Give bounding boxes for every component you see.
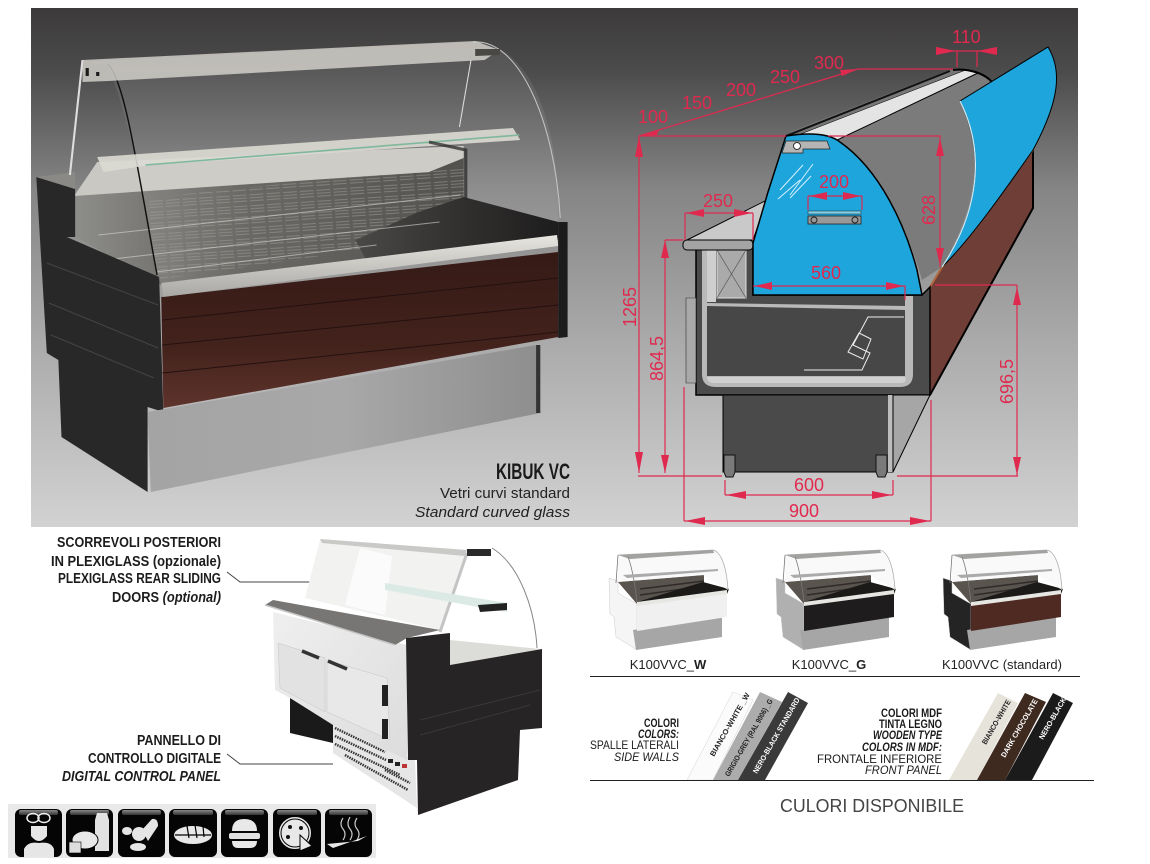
canopy white strip bbox=[800, 70, 978, 142]
blue side glass bbox=[942, 47, 1057, 267]
wood colour swatches: BIANCO-WHITE bbox=[980, 698, 1013, 746]
blue product area bbox=[753, 134, 922, 295]
dimension labels: 600 bbox=[794, 475, 824, 495]
service column bbox=[706, 250, 716, 302]
wood colour swatches bbox=[949, 693, 1073, 780]
base bbox=[723, 395, 893, 472]
dimension labels: 864,5 bbox=[647, 336, 667, 381]
dimension labels: 560 bbox=[811, 263, 841, 283]
door 1 bbox=[278, 643, 325, 712]
icon: chef bbox=[15, 809, 62, 857]
model labels: K100VVC_W bbox=[630, 657, 707, 672]
wood colours text: FRONT PANEL bbox=[865, 763, 942, 777]
dark tub bbox=[356, 197, 558, 260]
side wall colours text: SIDE WALLS bbox=[614, 750, 679, 764]
dimension labels: 1265 bbox=[620, 287, 640, 327]
side wall colours text bbox=[590, 716, 679, 764]
icon: hot plate bbox=[325, 809, 372, 857]
wood colours text: COLORS IN MDF: bbox=[862, 740, 942, 754]
cabinet body bbox=[696, 248, 930, 395]
callout: rear sliding doors bbox=[51, 535, 365, 606]
icon: loaf bbox=[169, 809, 217, 857]
dimension labels: 110 bbox=[952, 27, 981, 47]
dimension labels: 150 bbox=[682, 93, 712, 113]
white body bbox=[273, 612, 407, 760]
wood colours text bbox=[817, 706, 943, 777]
shelf bracket bbox=[808, 216, 861, 224]
callout: digital control panel bbox=[62, 733, 333, 785]
dimension labels: 628 bbox=[919, 195, 939, 225]
front rail bbox=[161, 235, 558, 297]
control panel bbox=[388, 759, 400, 766]
back wall bbox=[72, 157, 558, 285]
callout: rear sliding doors: DOORS (optional) bbox=[112, 590, 221, 606]
pale band under the shelf bbox=[74, 146, 464, 196]
under-cabinet bbox=[290, 698, 333, 743]
rear view display case photo bbox=[265, 539, 542, 815]
variant: grey bbox=[776, 550, 896, 650]
model labels: K100VVC (standard) bbox=[942, 657, 1062, 672]
grille bbox=[333, 723, 417, 808]
dimension labels: 250 bbox=[703, 191, 733, 211]
dimension labels: 250 bbox=[770, 67, 800, 87]
callout: rear sliding doors: SCORREVOLI POSTERIORI bbox=[57, 535, 221, 551]
side wall colour swatches bbox=[687, 690, 808, 780]
brown side panel bbox=[930, 150, 1033, 395]
wood colours text: FRONTALE INFERIORE bbox=[817, 752, 942, 766]
dimension labels: 696,5 bbox=[997, 359, 1017, 404]
black side bbox=[406, 633, 542, 815]
dimension labels: 200 bbox=[819, 172, 849, 192]
door 2 bbox=[327, 660, 390, 740]
side wall colours text: SPALLE LATERALI bbox=[590, 738, 679, 752]
side wall colours text: COLORI bbox=[644, 716, 679, 730]
steel base bbox=[148, 345, 540, 492]
wood front bbox=[161, 252, 558, 408]
wood colours text: COLORI MDF bbox=[881, 706, 942, 720]
callout: digital control panel: PANNELLO DI bbox=[137, 733, 221, 749]
subtitle english: Standard curved glass bbox=[415, 504, 571, 521]
heading: available colours: CULORI DISPONIBILE bbox=[780, 795, 964, 816]
glass reflection bbox=[778, 164, 813, 199]
technical cross-section drawing bbox=[683, 47, 1057, 477]
model labels bbox=[630, 657, 1062, 672]
feet bbox=[724, 455, 735, 477]
dimension labels bbox=[620, 27, 1017, 521]
wood colours text: TINTA LEGNO bbox=[879, 717, 942, 731]
tub interior bbox=[450, 640, 540, 665]
dimension labels: 200 bbox=[726, 80, 756, 100]
main display case photo bbox=[36, 41, 568, 492]
side wall colours text: COLORS: bbox=[638, 727, 679, 741]
dimension lines bbox=[635, 47, 1021, 525]
icon: burger bbox=[221, 809, 268, 857]
chilled tub frame bbox=[702, 250, 913, 387]
variant: standard bbox=[943, 550, 1063, 650]
canopy grey surface bbox=[833, 73, 992, 280]
black strip right bbox=[558, 222, 568, 338]
callout: digital control panel: CONTROLLO DIGITALE bbox=[88, 751, 221, 767]
shelf bbox=[385, 583, 507, 612]
callout: digital control panel: DIGITAL CONTROL PANEL bbox=[62, 769, 221, 785]
lamp holder bbox=[782, 141, 830, 153]
wood colour swatches: NERO-BLACK bbox=[1037, 695, 1068, 741]
dimension labels: 900 bbox=[789, 501, 819, 521]
wood colours text: WOODEN TYPE bbox=[873, 728, 943, 742]
panel: hero background bbox=[31, 8, 1078, 527]
icon: dairy bbox=[66, 809, 113, 857]
top rail bbox=[82, 41, 499, 82]
black side wall bbox=[36, 177, 163, 492]
title: KIBUK VC: KIBUK VC bbox=[496, 459, 570, 484]
callout: rear sliding doors: PLEXIGLASS REAR SLIDING bbox=[58, 571, 221, 587]
callout: rear sliding doors: IN PLEXIGLASS (opzionale) bbox=[51, 554, 221, 570]
left service panel bbox=[686, 298, 696, 383]
shelf bbox=[97, 128, 520, 172]
model variant thumbnails bbox=[609, 550, 1063, 650]
icon: bread slices bbox=[118, 809, 165, 857]
dimension labels: 300 bbox=[814, 53, 844, 73]
variant: white bbox=[609, 550, 729, 650]
counter shelf bbox=[687, 200, 767, 240]
rear glass bbox=[305, 540, 467, 630]
side wall colour swatches: GRIGIO-GREY (RAL 9006) _G bbox=[723, 697, 775, 778]
food icon strip bbox=[8, 804, 376, 858]
side wall colour swatches: BIANCO-WHITE _W bbox=[708, 690, 752, 758]
side wall colour swatches: NERO-BLACK STANDARD bbox=[751, 696, 802, 775]
counter top bbox=[683, 240, 753, 250]
model labels: K100VVC_G bbox=[792, 657, 866, 672]
wood colour swatches: DARK CHOCOLATE bbox=[999, 697, 1040, 759]
icon: pizza bbox=[273, 809, 321, 857]
dimension labels: 100 bbox=[638, 107, 668, 127]
glass bbox=[82, 42, 558, 283]
subtitle: Vetri curvi standard bbox=[440, 485, 570, 502]
counter top bbox=[265, 600, 440, 645]
title: KIBUK VC bbox=[415, 459, 571, 521]
